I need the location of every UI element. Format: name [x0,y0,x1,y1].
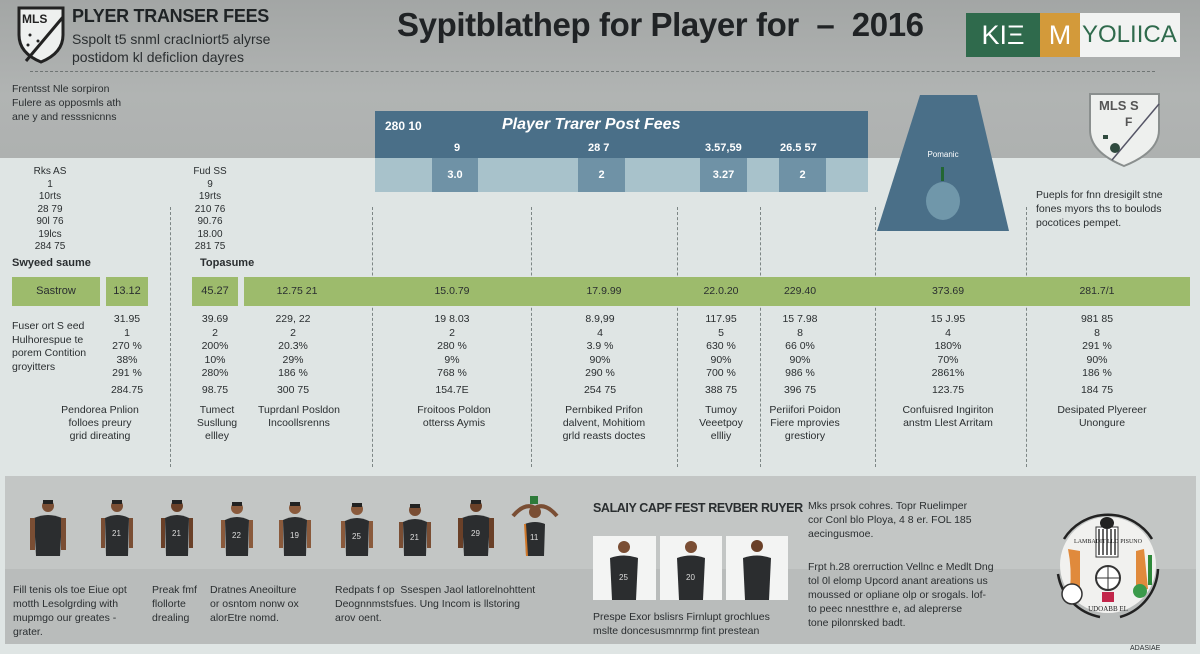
icon: circular club crest: LAMBADIT LLD PISUNO [1074,539,1143,545]
position descriptions: Tumoy [705,404,737,416]
position descriptions: dalvent, Mohitiom [563,417,645,429]
icon: MLS shield top-left: MLS [22,12,47,26]
data table columns: 10% [204,354,226,366]
position descriptions: Incoollsrenns [268,417,330,429]
position descriptions: grestiory [785,430,825,442]
green summary bar: 22.0.20 [703,285,739,297]
right notes: cor Conl blo Ploya, 4 8 er. FOL 185 [808,514,972,526]
photo caption [593,611,770,637]
title block top-left [72,6,270,65]
data table columns: 981 85 [1081,313,1113,325]
green summary bar: 15.0.79 [434,285,470,297]
data table columns: 31.95 [114,313,140,325]
left stats column 2: 9 [207,178,213,190]
player photos [593,536,788,600]
green summary bar: 373.69 [932,285,964,297]
green summary bar: 281.7/1 [1079,285,1115,297]
data table columns: 2861% [932,367,964,379]
trapezoid panel [877,95,1009,231]
right side note: fones myors ths to boulods [1036,203,1161,215]
intro text: ane y and resssnicnns [12,111,116,123]
panel: blue fee table: 3.0 [447,169,463,181]
data table columns: 90% [1086,354,1108,366]
panel: bottom players section: Deognnmstsfues. Ung Incom is llstoring [335,598,520,610]
panel: bottom players section: drealing [152,612,189,624]
player captions [13,584,127,638]
right notes: Mks prsok cohres. Topr Ruelimper [808,500,967,512]
position descriptions: folloes preury [68,417,132,429]
left stats column 1: 19lcs [38,228,62,240]
data table columns: 2 [290,326,296,338]
left stats column 1: 1 [47,178,53,190]
right side note: pocotices pempet. [1036,217,1121,229]
green summary bar: 12.75 21 [277,285,317,297]
panel: blue fee table [375,111,868,192]
row label: porem Contition [12,347,86,359]
intro text [12,83,121,123]
data table columns: 123.75 [932,384,964,396]
position descriptions: otterss Aymis [423,417,485,429]
left stats column 2: 18.00 [197,228,223,240]
panel: blue fee table: Player Trarer Post Fees [502,116,680,133]
player figures: 22 [232,531,241,540]
data table columns: 38% [116,354,138,366]
player figures: 29 [471,529,480,538]
player photos: 20 [686,573,695,582]
data table columns: 290 % [585,367,615,379]
title block top-left: Sspolt t5 snml cracIniort5 alyrse [72,31,270,47]
data table columns: 396 75 [784,384,816,396]
position descriptions: Pernbiked Prifon [565,404,643,416]
data table columns: 186 % [278,367,308,379]
data table columns [111,313,1113,396]
position descriptions: Tumect [200,404,234,416]
panel: bottom players section [5,476,1196,644]
data table columns: 15 J.95 [931,313,965,325]
panel: blue fee table: 9 [454,142,460,154]
dividers [170,207,171,467]
player figures [30,496,558,556]
data table columns: 180% [935,340,961,352]
text: Topasume [200,257,254,269]
data table columns: 184 75 [1081,384,1113,396]
data table columns: 4 [945,326,951,338]
photo caption: mslte doncesusmnrmp fint prestean [593,625,759,637]
panel: bottom players section: or osntom nonw ox [210,598,299,610]
panel: blue fee table: 3.27 [713,169,734,181]
left stats column 1: 28 79 [37,204,63,214]
title block top-left: PLYER TRANSER FEES [72,6,269,26]
panel: blue fee table: 280 10 [385,119,422,133]
position descriptions: Confuisred Ingiriton [902,404,994,416]
labels above green bar: Swyeed saume [12,257,91,269]
data table columns: 284.75 [111,384,143,396]
icon: MLS shield top-left [18,6,64,64]
intro text: Fulere as opposmls ath [12,97,121,109]
player captions: grater. [13,626,43,638]
icon: MLS shield right: F [1125,115,1132,129]
data table columns: 8.9,99 [585,313,615,325]
position descriptions: Pendorea Pnlion [61,404,139,416]
player captions: Fill tenis ols toe Eiue opt [13,584,127,596]
logo: KIEM YOLICA: KIΞ [981,20,1025,50]
green summary bar: Sastrow [36,285,76,297]
data table columns: 8 [1094,326,1100,338]
panel: bottom players section: flollorte [152,598,186,610]
data table columns: 19 8.03 [434,313,470,325]
position descriptions: Periifori Poidon [769,404,841,416]
green summary bar: 13.12 [113,285,141,297]
panel: blue fee table: 2 [799,169,806,181]
data table columns: 986 % [785,367,815,379]
title block top-left: postidom kl deficlion dayres [72,49,244,65]
panel: bottom players section: to peec nnestthre e, ad aleprerse [808,603,962,615]
data table columns: 291 % [1082,340,1112,352]
right notes: aecingusmoe. [808,528,873,540]
panel: bottom players section: arov oent. [335,612,382,624]
panel: blue fee table: 3.57,59 [705,142,742,154]
trapezoid panel: Pomanic [927,150,959,159]
left stats column 1 [34,166,66,252]
position descriptions: ellley [205,430,229,442]
data table columns: 768 % [437,367,467,379]
data table columns: 700 % [706,367,736,379]
left stats column 2: 281 75 [195,241,225,252]
panel: blue fee table: 2 [598,169,605,181]
player photos: 25 [619,573,628,582]
intro text: Frentsst Nle sorpiron [12,83,109,95]
panel: blue fee table: 26.5 57 [780,142,817,154]
data table columns: 3.9 % [587,340,613,352]
left stats column 2 [193,166,227,252]
panel: bottom players section: Redpats f op Ssespen Jaol latlorelnohttent [335,584,535,596]
panel: blue fee table: 28 7 [588,142,609,154]
data table columns: 39.69 [202,313,228,325]
player figures: 21 [410,533,419,542]
logo: KIEM YOLICA [966,13,1180,57]
panel: bottom players section: moussed or opliane olp or srogals. lof- [808,589,986,601]
data table columns: 280 % [437,340,467,352]
data table columns: 270 % [112,340,142,352]
panel: bottom players section: Frpt h.28 orerruction Vellnc e Medlt Dng [808,561,994,573]
green summary bar: 45.27 [201,285,229,297]
data table columns: 254 75 [584,384,616,396]
data table columns: 8 [797,326,803,338]
data table columns: 200% [202,340,228,352]
data table columns: 2 [212,326,218,338]
header background [0,0,1200,158]
panel: bottom players section: tone pilonrsked badt. [808,617,905,629]
row label: Fuser ort S eed [12,320,84,332]
data table columns: 70% [937,354,958,366]
data table columns: 117.95 [705,313,737,325]
panel: bottom players section: Preak fmf [152,584,197,596]
player captions: motth Lesolgrding with [13,598,118,610]
position descriptions: Froitoos Poldon [417,404,491,416]
panel: bottom players section: alorEtre nomd. [210,612,279,624]
player figures: 21 [172,529,181,538]
photo caption: Prespe Exor bslisrs Firnlupt grochlues [593,611,770,623]
data table columns: 15 7.98 [782,313,818,325]
right side note: Puepls for fnn dresigilt stne [1036,189,1163,201]
data table columns: 388 75 [705,384,737,396]
green summary bar: 229.40 [784,285,816,297]
position descriptions: Fiere mprovies [770,417,840,429]
position descriptions: ellliy [711,430,731,442]
row label [12,320,86,372]
data table columns: 630 % [706,340,736,352]
data table columns: 280% [202,367,228,379]
left stats column 1: 10rts [39,191,61,202]
position descriptions: Desipated Plyereer [1057,404,1147,416]
data table columns: 291 % [112,367,142,379]
position descriptions: Unongure [1079,417,1125,429]
player captions: mupmgo our greates - [13,612,116,624]
position descriptions [61,404,1147,442]
data table columns: 154.7E [435,384,469,396]
right notes [808,500,972,540]
data table columns: 4 [597,326,603,338]
main title: Sypitblathep for Player for – 2016 [397,6,924,43]
row label: Hulhorespue te [12,334,83,346]
panel: bottom players section: Dratnes Aneoilture [210,584,296,596]
icon: circular club crest: UDOABB EL [1088,605,1128,613]
player figures: 19 [290,531,299,540]
data table columns: 90% [789,354,810,366]
right side note [1036,189,1163,229]
data table columns: 2 [449,326,455,338]
salary cap heading: SALAIY CAPF FEST REVBER RUYER [593,501,803,515]
position descriptions: anstm Llest Arritam [903,417,993,429]
left stats column 1: 90l 76 [36,216,64,227]
data table columns: 1 [124,326,130,338]
green summary bar: 17.9.99 [586,285,622,297]
position descriptions: grld reasts doctes [563,430,645,442]
icon: MLS shield right: MLS S [1099,98,1139,113]
position descriptions: Tuprdanl Posldon [258,404,340,416]
data table columns: 186 % [1082,367,1112,379]
left stats column 2: 210 76 [195,204,225,214]
player figures: 25 [352,532,361,541]
icon: MLS shield right [1089,93,1160,167]
left stats column 2: 19rts [199,191,221,202]
panel: bottom players section: tol 0l elomp Upcord anant areations us [808,575,988,587]
data table columns: 20.3% [278,340,308,352]
data table columns: 66 0% [785,340,815,352]
data table columns: 5 [718,326,724,338]
left stats column 1: 284 75 [35,241,65,252]
left stats column 2: Fud SS [193,166,227,177]
icon: circular club crest [1056,514,1160,618]
data table columns: 90% [589,354,610,366]
green summary bar [12,277,1190,306]
logo: KIEM YOLICA: YOLIICA [1082,21,1177,48]
footer tag: ADASIAE [1130,645,1160,652]
player figures: 21 [112,529,121,538]
player figures: 11 [530,533,539,542]
data table columns: 98.75 [202,384,228,396]
left stats column 1: Rks AS [34,166,66,177]
data table columns: 229, 22 [275,313,311,325]
left stats column 2: 90.76 [197,216,223,227]
data table columns: 300 75 [277,384,309,396]
data table columns: 9% [444,354,460,366]
position descriptions: Susllung [197,417,237,429]
data table columns: 29% [282,354,304,366]
row label: groyitters [12,360,55,372]
logo: KIEM YOLICA: M [1049,20,1071,50]
position descriptions: Veeetpoy [699,417,743,429]
position descriptions: grid direating [70,430,130,442]
data table columns: 90% [710,354,732,366]
